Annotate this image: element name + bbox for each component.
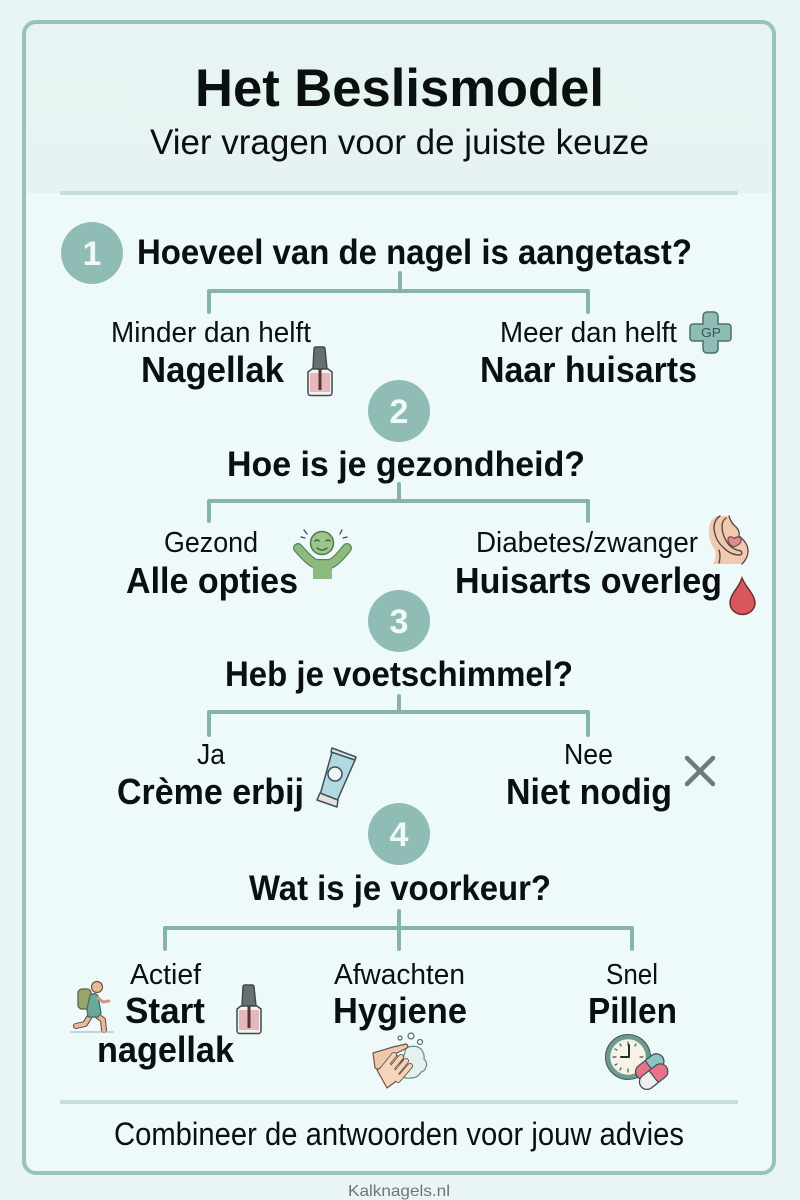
connector 1 [209, 273, 588, 312]
number badge 1: 1 [83, 235, 101, 273]
icon: cross mark [687, 758, 713, 784]
icon: nail polish small [237, 985, 261, 1034]
option: gezond: Gezond [164, 527, 258, 559]
title: Het Beslismodel [195, 59, 604, 118]
option: minder dan helft: Nagellak [141, 349, 285, 390]
option: ja [117, 739, 304, 812]
option: actief [97, 959, 235, 1070]
option: ja: Ja [197, 739, 225, 771]
option: gezond [126, 527, 298, 601]
icon: happy person [298, 530, 347, 579]
option: diabetes/zwanger [455, 527, 722, 601]
option: actief: Start [125, 990, 205, 1031]
option: actief: Actief [130, 959, 201, 991]
option: afwachten [333, 959, 467, 1031]
subtitle: Vier vragen voor de juiste keuze [150, 123, 649, 162]
number badge 4 [368, 803, 430, 865]
option: minder dan helft: Minder dan helft [111, 317, 311, 349]
icon: pregnant belly [709, 516, 748, 564]
option: actief: nagellak [97, 1029, 235, 1070]
option: gezond: Alle opties [126, 560, 298, 601]
icon: hiker [71, 982, 113, 1032]
option: afwachten: Afwachten [334, 959, 465, 991]
number badge 3: 3 [390, 603, 408, 641]
question 2: Hoe is je gezondheid? [227, 445, 585, 484]
number badge 4: 4 [390, 816, 409, 854]
option: afwachten: Hygiene [333, 990, 467, 1031]
option: diabetes/zwanger: Huisarts overleg [455, 560, 722, 601]
option: meer dan helft [480, 317, 697, 390]
question 3: Heb je voetschimmel? [225, 655, 573, 694]
footer note: Combineer de antwoorden voor jouw advies [114, 1116, 684, 1152]
connector 2 [209, 484, 588, 521]
option: meer dan helft: Naar huisarts [480, 349, 697, 390]
step 3 [117, 590, 713, 812]
connector 4 [165, 911, 632, 949]
icon: cream tube [317, 748, 356, 807]
option: diabetes/zwanger: Diabetes/zwanger [476, 527, 698, 559]
icon: clock and pills [606, 1034, 671, 1092]
icon: blood drop [730, 578, 755, 614]
option: nee [506, 739, 672, 812]
option: nee: Niet nodig [506, 771, 672, 812]
source credit: Kalknagels.nl [348, 1183, 450, 1200]
icon: nail polish [308, 347, 332, 396]
option: meer dan helft: Meer dan helft [500, 317, 677, 349]
step 1 [61, 222, 731, 396]
number badge 2 [368, 380, 430, 442]
connector 3 [209, 696, 588, 735]
question 1: Hoeveel van de nagel is aangetast? [137, 233, 692, 272]
step 4 [71, 803, 677, 1092]
icon: GP cross [690, 312, 731, 353]
number badge 3 [368, 590, 430, 652]
number badge 1 [61, 222, 123, 284]
option: minder dan helft [111, 317, 311, 390]
icon: GP cross: GP [701, 325, 721, 340]
question 4: Wat is je voorkeur? [249, 869, 551, 908]
number badge 2: 2 [390, 393, 408, 431]
option: snel: Pillen [588, 990, 677, 1031]
option: nee: Nee [564, 739, 613, 771]
option: snel: Snel [606, 959, 658, 991]
option: ja: Crème erbij [117, 771, 304, 812]
icon: washing hands [373, 1033, 427, 1088]
option: snel [588, 959, 677, 1031]
step 2 [126, 380, 755, 614]
